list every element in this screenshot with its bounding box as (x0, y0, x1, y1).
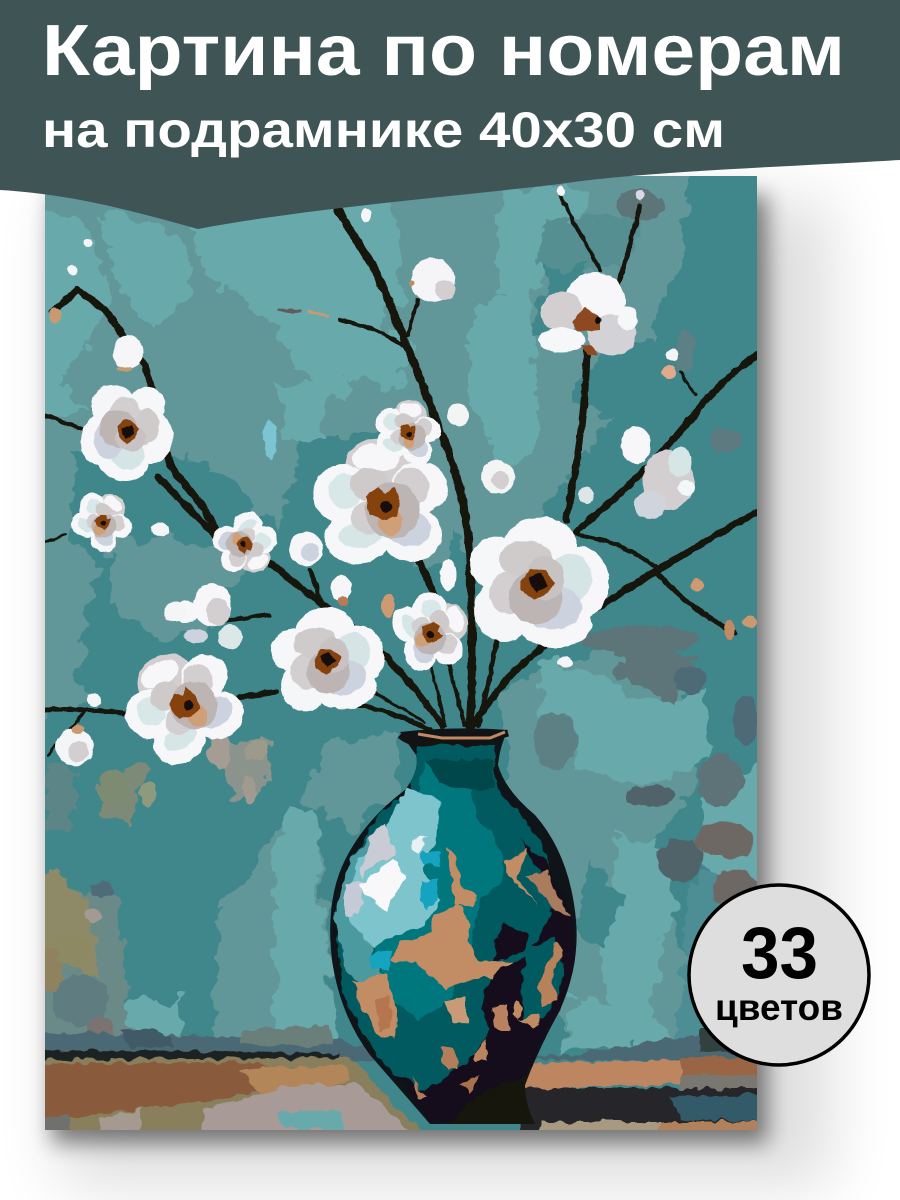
vase (330, 728, 577, 1130)
header banner (0, 0, 900, 229)
blossom: middle small (392, 592, 468, 671)
blossom: lower left (124, 653, 244, 766)
bare black branches (45, 195, 757, 755)
blossom: large centre (313, 438, 448, 564)
white blossoms (49, 186, 758, 779)
badge: 33 colours (689, 885, 869, 1065)
wall base mottled band (30, 1025, 760, 1062)
blossom: upper left (80, 385, 174, 482)
blossom: right (621, 426, 694, 519)
badge label: цветов (715, 987, 843, 1028)
painting: vase with blossoming branches (30, 170, 770, 1140)
wall blotches (38, 189, 757, 1044)
painted teal wall background (30, 170, 770, 1130)
blossom: far left small (70, 492, 132, 552)
blossom: top centre (375, 400, 442, 464)
canvas drop shadow (52, 195, 830, 1185)
blossom: large right (470, 517, 609, 648)
vase body (330, 728, 577, 1124)
vase rim (400, 733, 508, 743)
badge number: 33 (741, 913, 818, 994)
blossom: upper right (538, 272, 638, 356)
table surface (45, 1055, 757, 1130)
blossom: left middle (212, 511, 278, 572)
blossom: lower centre (270, 606, 385, 712)
blossom: left lower small (174, 583, 242, 649)
subtitle: на подрамнике 40х30 см (42, 102, 725, 158)
flower buds (49, 186, 758, 766)
title: Картина по номерам (42, 11, 845, 91)
